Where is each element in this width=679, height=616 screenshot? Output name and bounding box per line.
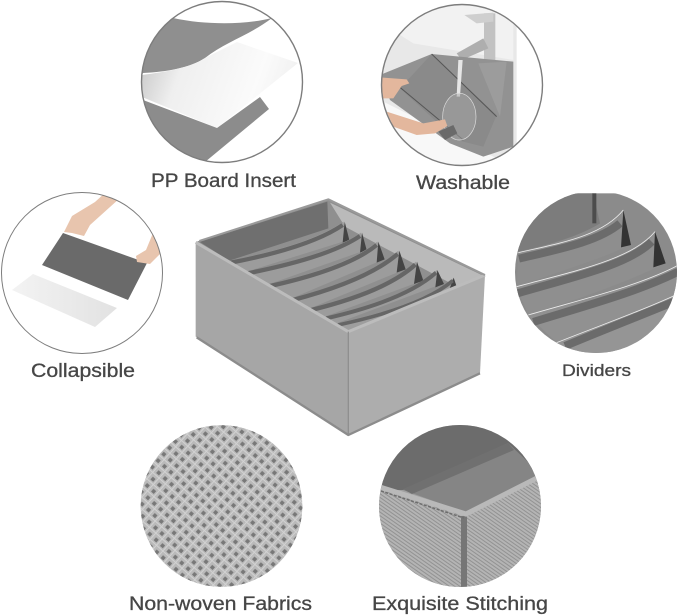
label: Non-woven Fabrics: Non-woven Fabrics	[129, 594, 312, 615]
dividers	[229, 222, 457, 330]
box interior	[197, 199, 485, 332]
left outer face	[196, 242, 348, 435]
label: Exquisite Stitching: Exquisite Stitching	[372, 594, 548, 615]
photo: fabric layers around white board	[142, 18, 298, 160]
panel: PP board insert	[140, 0, 304, 164]
label: Washable: Washable	[416, 173, 510, 194]
panel: non-woven fabric texture	[140, 425, 302, 587]
back inner wall	[199, 202, 328, 261]
circle outline	[2, 192, 162, 354]
label: Collapsible: Collapsible	[31, 361, 135, 382]
photo: fabric under running faucet	[382, 6, 516, 158]
photo: woven fabric swatch	[140, 425, 302, 587]
label: Dividers: Dividers	[562, 361, 631, 380]
rim and seams	[196, 199, 485, 435]
circle outline	[382, 4, 542, 166]
right outer face	[348, 275, 485, 435]
right inner wall	[330, 203, 482, 287]
panel: stitching close-up	[375, 420, 545, 590]
photo: box corner with stitched rim	[375, 420, 545, 590]
photo: fabric divider strips	[512, 193, 679, 360]
photo: hands lifting folded board	[12, 196, 160, 327]
panel: washable	[377, 0, 542, 173]
panel: collapsible	[0, 190, 165, 355]
panel: storage box	[196, 199, 485, 435]
circle outline	[142, 2, 302, 162]
panel: dividers close-up	[512, 193, 679, 360]
label: PP Board Insert: PP Board Insert	[151, 171, 297, 192]
